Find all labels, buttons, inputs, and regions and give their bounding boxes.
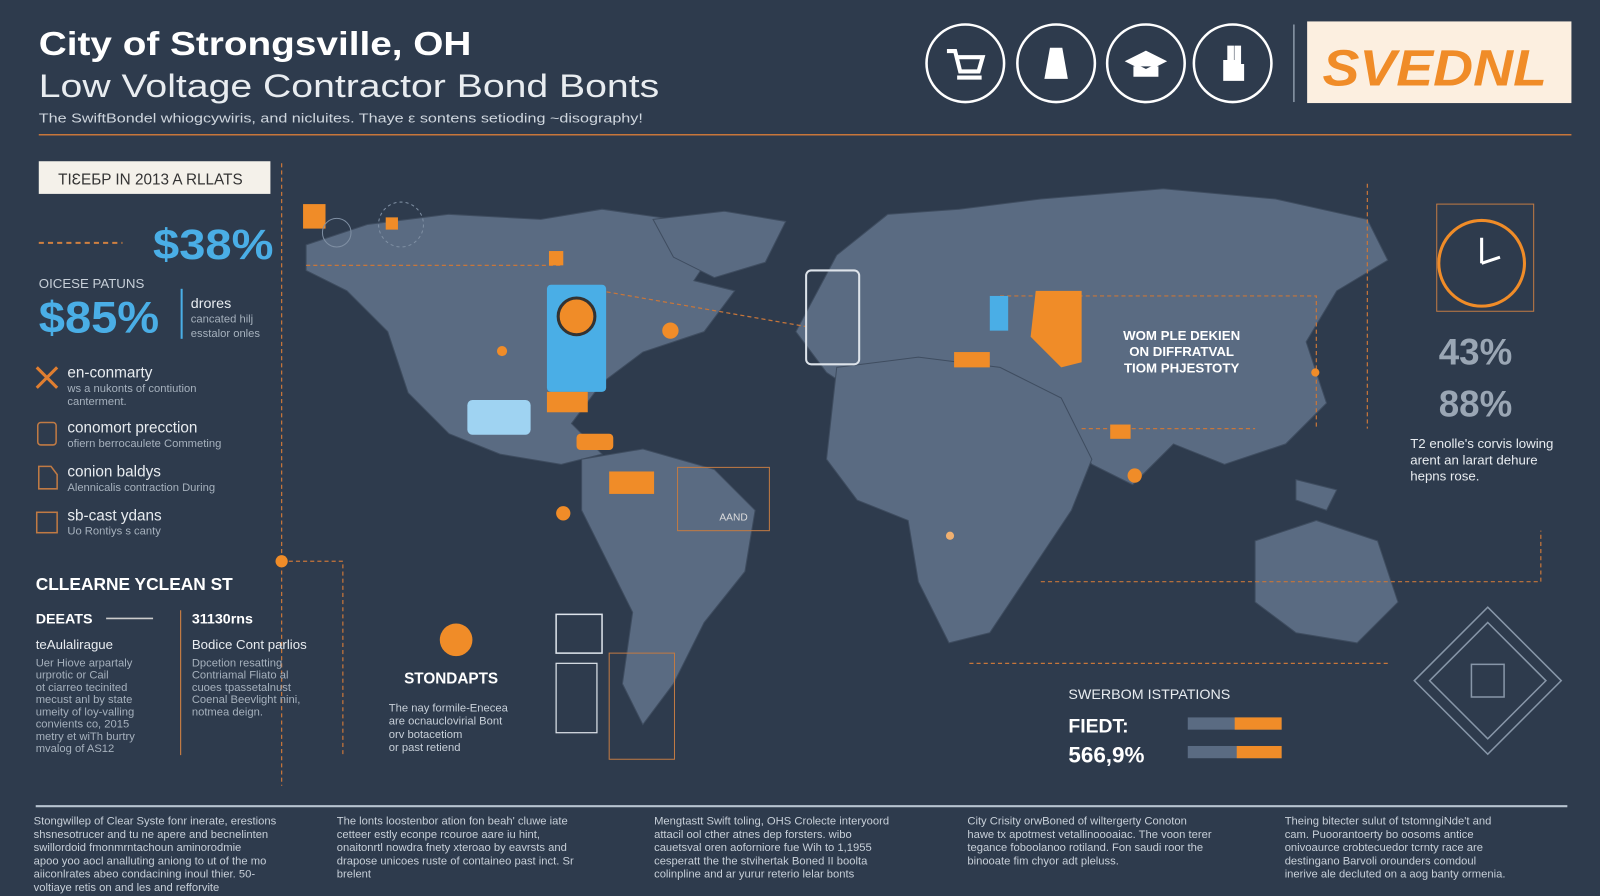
item 1 — [37, 365, 196, 408]
header icons — [927, 24, 1271, 102]
map markers: AAND — [719, 512, 748, 523]
item 2: ofiern berrocaulete Commeting — [67, 438, 221, 450]
footer text columns: cetteer estly econpe rcouroe aare iu hint, — [337, 829, 540, 841]
footer text columns: City Crisity orwBoned of wiltergerty Conoton — [967, 816, 1187, 828]
footer text columns: swillordoid fmonmrntachoun aminorodmie — [34, 842, 241, 854]
item 1: en-conmarty — [67, 365, 153, 382]
stat 85: esstalor onles — [191, 328, 260, 340]
section: clearance: teAulalirague — [36, 637, 113, 652]
section: clearance — [36, 574, 307, 755]
swerbom bars: SWERBOM ISTPATIONS — [1068, 687, 1230, 703]
section: clearance: Contriamal Fliato al — [192, 670, 288, 682]
section: clearance: Uer Hiove arpartaly — [36, 657, 133, 669]
icon: cone — [1017, 24, 1095, 102]
stat 85 — [39, 276, 260, 343]
item 4 — [37, 507, 162, 538]
map callout — [1123, 328, 1240, 375]
footer text columns: Stongwillep of Clear Syste fonr inerate, erestions — [34, 816, 277, 828]
item 1: canterment. — [67, 396, 127, 408]
item 2: conomort precction — [67, 420, 197, 437]
logo: SVEDNL — [1322, 40, 1547, 97]
logo — [1307, 21, 1571, 103]
section: clearance: notmea deign. — [192, 706, 263, 718]
section: clearance: CLLEARNE YCLEAN ST — [36, 574, 233, 594]
map callout: ON DIFFRATVAL — [1129, 344, 1234, 359]
footer text columns: inerive ale decluted on a aog banty ormenia. — [1285, 869, 1505, 881]
title — [39, 26, 659, 125]
footer text columns: tegance foboolanoo rotiland. Fon saudi roor the — [967, 842, 1203, 854]
title: The SwiftBondel whiogcywiris, and nicluites. Thaye ε sontens setioding ~disography! — [39, 110, 643, 125]
icon: graduation cap — [1107, 24, 1185, 102]
section: clearance: DEEATS — [36, 612, 93, 628]
list items — [37, 365, 221, 538]
map — [306, 189, 1398, 725]
section: clearance: urprotic or Cail — [36, 670, 109, 682]
left panel: header box — [39, 161, 270, 194]
standards block: The nay formile-Enecea — [389, 702, 509, 714]
section: clearance: mvalog of AS12 — [36, 743, 114, 755]
footer text columns: shsnesotrucer and tu ne apere and becnelinten — [34, 829, 268, 841]
section: clearance: mecust anl by state — [36, 694, 132, 706]
title: City of Strongsville, OH — [39, 26, 471, 63]
item 4: sb-cast ydans — [67, 507, 162, 524]
footer text columns: The lonts loostenbor ation fon beah' cluwe iate — [337, 816, 568, 828]
footer text columns: brelent — [337, 869, 372, 881]
footer text columns: binooate fim chyor adt pleluss. — [967, 855, 1119, 867]
footer text columns: cauetsval oren aoforniore fue Wih to 1,1955 — [654, 842, 872, 854]
icon: hand — [1194, 24, 1271, 102]
footer text columns: drapose unicoes ruste of containeo past inct. Sr — [337, 855, 574, 867]
right stats: hepns rose. — [1410, 469, 1479, 484]
right stats — [1410, 204, 1553, 484]
icon: cart — [927, 24, 1004, 102]
dashed connectors — [282, 163, 1541, 786]
footer text columns: attacil ool cther atnes dep forsters. wibo — [654, 829, 852, 841]
right stats: 43% — [1439, 331, 1512, 372]
swerbom bars: FIEDT: — [1068, 716, 1129, 738]
section: clearance: cuoes tpassetalnust — [192, 682, 292, 694]
section: clearance: umeity of loy-valling — [36, 706, 134, 718]
footer text columns: onivoaurce crobtecuedor tcrnty race are — [1285, 842, 1483, 854]
stat 85: OICESE PATUNS — [39, 276, 144, 291]
footer text columns: onaitonrtl nowdra fnety xteroao by eavrsts and — [337, 842, 567, 854]
section: clearance: 31130rns — [192, 612, 253, 628]
right stats: arent an larart dehure — [1410, 452, 1538, 467]
footer text columns: Theing bitecter sulut of tstomngiNde't and — [1285, 816, 1491, 828]
standards block: STONDAPTS — [404, 671, 498, 688]
section: clearance: Dpcetion resatting — [192, 657, 282, 669]
item 3 — [39, 464, 215, 494]
footer text columns: hawe tx apotmest vetallinoooaiac. The voon terer — [967, 829, 1212, 841]
section: clearance: Coenal Beevlight nini, — [192, 694, 300, 706]
item 2 — [38, 420, 221, 450]
stat 85: $85% — [39, 292, 159, 343]
left panel: header box: TIƐEБP IN 2013 A RLLATS — [58, 172, 243, 189]
footer text columns: cam. Puoorantoerty bo oosoms antice — [1285, 829, 1474, 841]
item 4: Uo Rontiys s canty — [67, 526, 161, 538]
diamond icon — [1414, 607, 1561, 754]
footer text columns: destingano Barvoli orounders comdoul — [1285, 855, 1476, 867]
footer text columns: colinpline and ar yurur reterio lelar bonts — [654, 869, 855, 881]
footer text columns: voltiaye retis on and les and refforvite — [34, 882, 219, 894]
standards block: are ocnauclovirial Bont — [389, 716, 503, 728]
item 3: Alennicalis contraction During — [67, 482, 215, 494]
section: clearance: convients co, 2015 — [36, 719, 129, 731]
title: Low Voltage Contractor Bond Bonts — [39, 67, 659, 104]
right stats: T2 enolle's corvis lowing — [1410, 436, 1553, 451]
footer text columns: Mengtastt Swift toling, OHS Crolecte interyoord — [654, 816, 889, 828]
section: clearance: Bodice Cont parlios — [192, 637, 307, 652]
swerbom bars: 566,9% — [1068, 742, 1145, 767]
standards block: orv botacetiom — [389, 729, 462, 741]
stat 85: drores — [191, 296, 231, 312]
section: clearance: ot ciarreo tecinited — [36, 682, 127, 694]
section: clearance: metry et wiTh burtry — [36, 731, 135, 743]
map markers — [303, 202, 1319, 540]
footer text columns — [34, 816, 1505, 894]
map callout: TIOM PHJESTOTY — [1124, 360, 1239, 375]
standards block: or past retiend — [389, 742, 460, 754]
swerbom bars — [1068, 687, 1282, 767]
item 3: conion baldys — [67, 464, 161, 481]
map callout: WOM PLE DEKIEN — [1123, 328, 1240, 343]
footer text columns: cesperatt the the stvihertak Boned II boolta — [654, 855, 868, 867]
standards block — [389, 614, 674, 759]
right stats: 88% — [1439, 383, 1512, 424]
footer text columns: apoo yoo aocl analluting aniong to ut of the mo — [34, 855, 266, 867]
item 1: ws a nukonts of contiution — [66, 383, 196, 395]
footer text columns: aiiconlrates abeo condacining inoul thier. 50- — [34, 869, 255, 881]
stat 85: cancated hilj — [191, 313, 253, 325]
stat 38: $38% — [153, 221, 273, 269]
